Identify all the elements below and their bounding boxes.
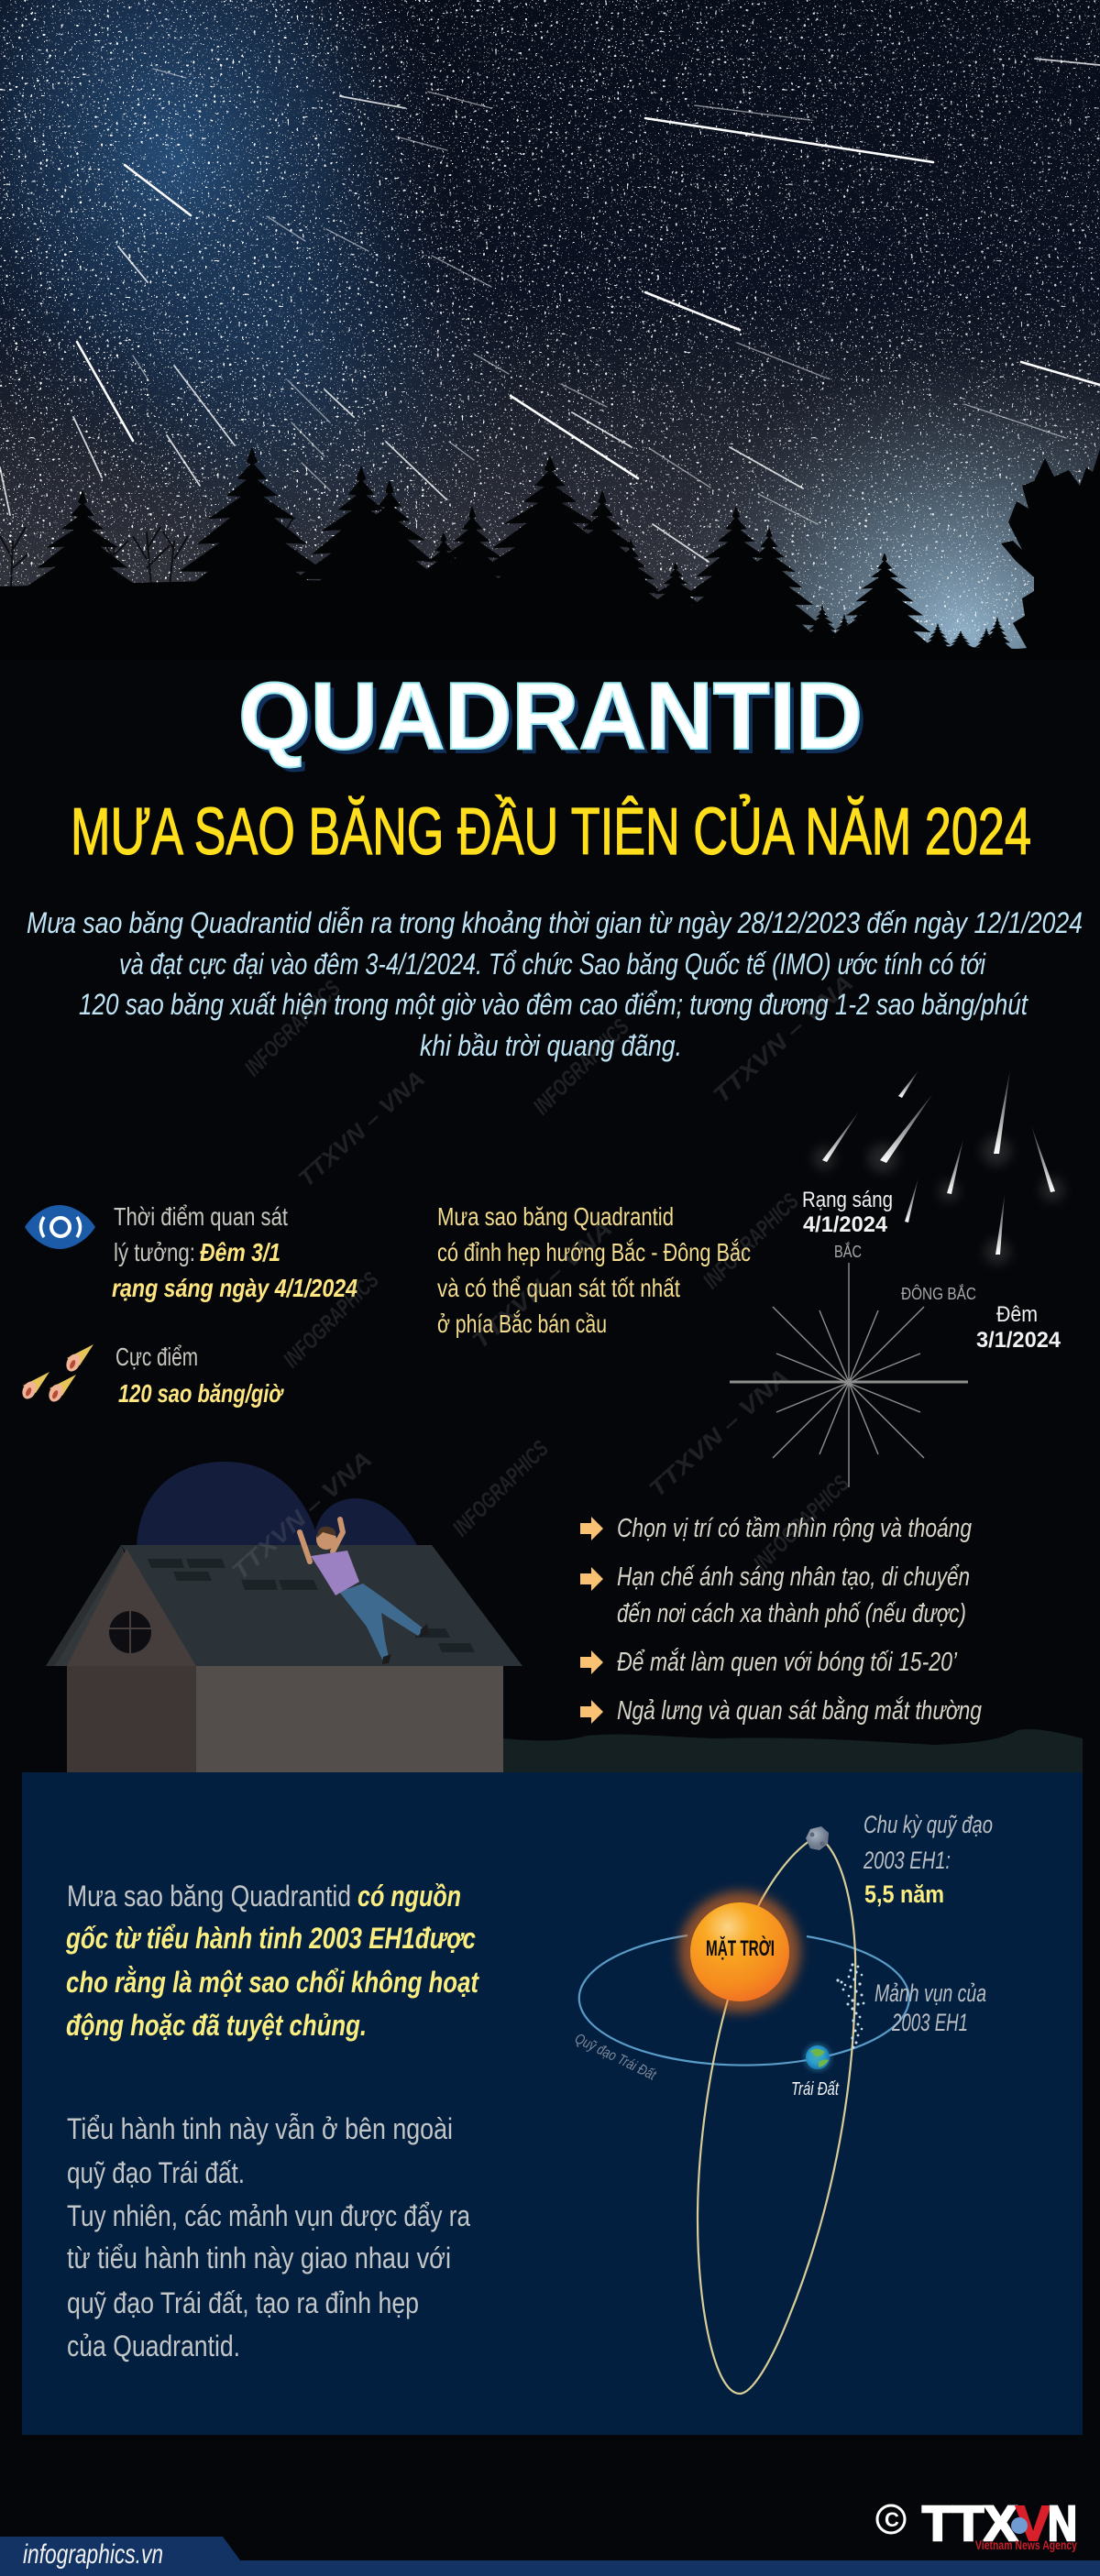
orbit labels: 2003 EH1 <box>891 2009 968 2036</box>
orbit labels: Quỹ đạo Trái Đất <box>572 2031 658 2084</box>
origin text: cho rằng là một sao chổi không hoạt <box>66 1966 479 1999</box>
sun: MẶT TRỜI <box>706 1935 775 1961</box>
explanation text <box>67 2112 470 2362</box>
explanation text: của Quadrantid. <box>67 2329 240 2362</box>
observation time text: Đêm 3/1 <box>200 1238 280 1266</box>
logo: TTXVN: TTX <box>922 2496 1018 2551</box>
radiant diagram labels: Rạng sáng <box>802 1188 893 1212</box>
watermarks: INFOGRAPHICS <box>698 1189 804 1294</box>
explanation text: quỹ đạo Trái đất, tạo ra đỉnh hẹp <box>67 2286 419 2319</box>
debris field <box>836 1963 864 2048</box>
observation time text <box>112 1202 358 1302</box>
main title: QUADRANTID <box>238 663 863 770</box>
watermarks: INFOGRAPHICS <box>448 1436 554 1541</box>
intro paragraph: khi bầu trời quang đãng. <box>420 1029 682 1062</box>
origin text: có nguồn <box>358 1880 461 1913</box>
tip 4: Ngả lưng và quan sát bằng mắt thường <box>617 1695 982 1726</box>
radiant star diagram <box>730 1263 968 1487</box>
person lying on roof <box>300 1519 429 1664</box>
radiant description text: và có thể quan sát tốt nhất <box>437 1274 680 1302</box>
watermarks: INFOGRAPHICS <box>240 976 346 1081</box>
icon: eye <box>25 1205 95 1249</box>
orbit labels: Mảnh vụn của <box>874 1979 986 2007</box>
watermarks: INFOGRAPHICS <box>529 1014 634 1120</box>
origin text <box>65 1880 479 2042</box>
round attic window <box>109 1611 151 1653</box>
observation time text: lý tưởng: <box>114 1238 195 1266</box>
peak rate text: Cực điểm <box>116 1343 198 1371</box>
panel: origin of the shower <box>22 1772 1083 2435</box>
tip 3: Để mắt làm quen với bóng tối 15-20’ <box>617 1647 957 1677</box>
explanation text: Tuy nhiên, các mảnh vụn được đẩy ra <box>67 2199 470 2232</box>
footer band <box>0 2537 1100 2576</box>
footer website: infographics.vn <box>23 2539 163 2570</box>
watermarks: TTXVN – VNA <box>468 1215 617 1354</box>
radiant diagram labels: Đêm <box>996 1302 1038 1327</box>
radiant description text: có đỉnh hẹp hướng Bắc - Đông Bắc <box>437 1238 751 1266</box>
radiant diagram labels: 4/1/2024 <box>803 1212 888 1237</box>
radiant description text: Mưa sao băng Quadrantid <box>437 1202 674 1231</box>
icon: small meteors <box>19 1344 94 1404</box>
peak rate text <box>116 1343 284 1408</box>
origin text: động hoặc đã tuyệt chủng. <box>66 2009 367 2042</box>
logo: TTXVN: V <box>1016 2496 1050 2551</box>
earth orbit <box>579 1935 909 2066</box>
tip 2 <box>580 1562 970 1628</box>
bare trees <box>0 518 298 586</box>
explanation text: quỹ đạo Trái đất. <box>67 2156 245 2189</box>
radiant description text: ở phía Bắc bán cầu <box>437 1310 607 1338</box>
explanation text: Tiểu hành tinh này vẫn ở bên ngoài <box>67 2112 453 2145</box>
orbit labels <box>572 1811 993 2099</box>
peak rate text: 120 sao băng/giờ <box>118 1379 284 1408</box>
origin text: gốc từ tiểu hành tinh 2003 EH1được <box>65 1922 476 1955</box>
radiant description text <box>437 1202 751 1338</box>
viewing tips list <box>580 1514 982 1726</box>
radiant diagram labels: ĐÔNG BẮC <box>901 1284 976 1303</box>
hero photo: starry sky with meteors and forest <box>0 0 1100 649</box>
earth <box>804 2044 831 2071</box>
house walls <box>67 1666 503 1773</box>
main title: QUADRANTID <box>243 668 867 774</box>
logo: TTXVN: C <box>885 2508 899 2531</box>
watermarks: TTXVN – VNA <box>644 1364 794 1503</box>
house roof <box>46 1545 522 1666</box>
origin text: Mưa sao băng Quadrantid <box>67 1880 351 1913</box>
asteroid 2003 EH1 <box>806 1826 829 1850</box>
intro paragraph <box>27 906 1083 1062</box>
comet orbit <box>698 1836 855 2394</box>
orbit labels: 5,5 năm <box>864 1880 944 1908</box>
tip 1: Chọn vị trí có tầm nhìn rộng và thoáng <box>617 1514 972 1543</box>
watermarks: INFOGRAPHICS <box>279 1267 384 1373</box>
orbit labels: Trái Đất <box>791 2079 840 2099</box>
watermarks: TTXVN – VNA <box>293 1066 430 1192</box>
hills behind house <box>137 1462 420 1551</box>
orbit labels: 2003 EH1: <box>863 1847 951 1874</box>
illustration: person on rooftop <box>46 1462 1083 1773</box>
observation time text: Thời điểm quan sát <box>114 1202 288 1231</box>
tip 2: đến nơi cách xa thành phố (nếu được) <box>617 1599 966 1628</box>
watermarks: TTXVN – VNA <box>709 970 858 1109</box>
logo: TTXVN: N <box>1048 2496 1077 2551</box>
orbit labels: Chu kỳ quỹ đạo <box>864 1811 993 1838</box>
orbit diagram <box>572 1811 993 2394</box>
illustration: falling meteors <box>813 1069 1064 1265</box>
watermarks: TTXVN – VNA <box>227 1446 377 1585</box>
watermarks <box>227 970 858 1585</box>
sun <box>679 1891 800 2012</box>
observation time text: rạng sáng ngày 4/1/2024 <box>112 1274 358 1302</box>
tip 2: Hạn chế ánh sáng nhân tạo, di chuyển <box>617 1562 970 1592</box>
radiant diagram labels <box>802 1188 1062 1353</box>
explanation text: từ tiểu hành tinh này giao nhau với <box>67 2242 451 2275</box>
radiant diagram labels: BẮC <box>834 1242 862 1261</box>
logo: TTXVN <box>877 2496 1077 2552</box>
watermarks: INFOGRAPHICS <box>749 1471 854 1576</box>
radiant diagram labels: 3/1/2024 <box>976 1328 1062 1353</box>
distant ground <box>503 1729 1083 1773</box>
